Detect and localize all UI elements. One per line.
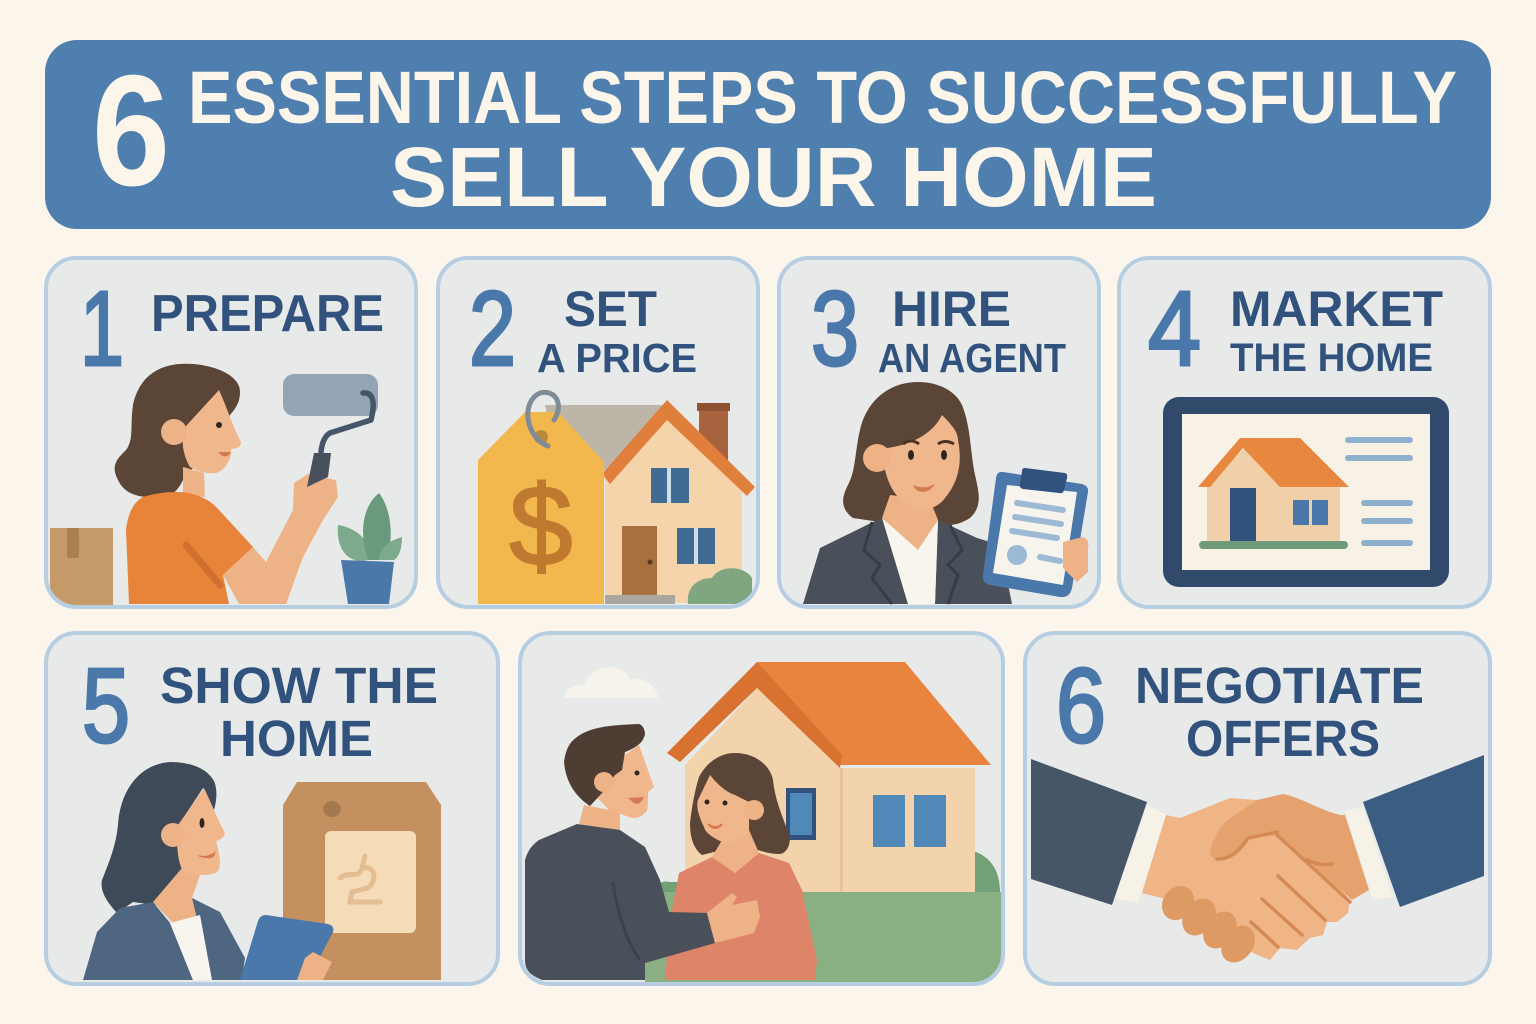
panel: step 1 prepare xyxy=(46,258,416,607)
illustration: house and tag xyxy=(478,392,755,604)
heading the home: THE HOME xyxy=(1230,336,1433,380)
icon: price tag: $ xyxy=(509,463,573,590)
left sleeve xyxy=(1031,759,1147,905)
right sleeve xyxy=(1363,755,1484,907)
heading hire: HIRE xyxy=(892,281,1011,337)
heading prepare: PREPARE xyxy=(151,285,384,343)
step number 2: 2 xyxy=(469,270,516,388)
handshake hands xyxy=(1142,794,1369,969)
figure: woman with tablet xyxy=(83,762,245,980)
panel: step 6 negotiate offers xyxy=(1025,633,1490,984)
icon: price tag xyxy=(478,392,604,604)
heading an agent: AN AGENT xyxy=(878,335,1066,381)
heading market: MARKET xyxy=(1230,281,1443,337)
icon: tablet listing xyxy=(1163,397,1449,587)
heading a price: A PRICE xyxy=(537,335,697,381)
figure: woman xyxy=(665,753,817,980)
illustration: woman painting xyxy=(50,364,402,605)
figure: agent xyxy=(803,382,1012,604)
heading show the: SHOW THE xyxy=(160,657,438,714)
step number 3: 3 xyxy=(811,270,859,388)
step number 4: 4 xyxy=(1148,270,1201,388)
icon: plant xyxy=(338,493,402,604)
panel: step 2 set a price xyxy=(438,258,758,607)
cuffs xyxy=(1115,805,1393,903)
step number 1: 1 xyxy=(80,270,124,388)
icon: paint roller xyxy=(283,374,378,452)
panel: step 5 show the home xyxy=(46,633,498,984)
illustration: agent showing home xyxy=(83,762,441,980)
heading set: SET xyxy=(564,281,657,337)
roller handle xyxy=(307,453,331,487)
icon: cloud xyxy=(564,667,658,698)
panel: step 4 market the home xyxy=(1119,258,1490,607)
figure: woman xyxy=(115,364,338,604)
heading offers: OFFERS xyxy=(1186,710,1380,767)
step number 6: 6 xyxy=(1056,647,1106,765)
icon: house on listing xyxy=(1198,438,1349,549)
icon: tablet xyxy=(240,915,333,980)
listing text lines xyxy=(1345,437,1413,546)
panel: buyers at house xyxy=(520,633,1003,984)
icon: bushes xyxy=(656,848,1000,892)
lawn xyxy=(645,892,1002,984)
title numeral: 6 xyxy=(92,43,170,219)
illustration: agent with clipboard xyxy=(803,382,1088,604)
panel: step 3 hire an agent xyxy=(779,258,1099,607)
illustration: handshake xyxy=(1031,755,1484,969)
icon: house xyxy=(545,400,755,604)
heading negotiate: NEGOTIATE xyxy=(1135,657,1424,714)
title banner xyxy=(45,40,1491,229)
heading home: HOME xyxy=(220,710,373,767)
icon: large house xyxy=(667,662,991,892)
step number 5: 5 xyxy=(82,647,130,765)
icon: cardboard box xyxy=(50,528,113,605)
title line 2: SELL YOUR HOME xyxy=(390,130,1157,224)
icon: brown door sign xyxy=(283,782,441,980)
icon: clipboard xyxy=(983,468,1088,597)
figure: man xyxy=(525,724,760,980)
